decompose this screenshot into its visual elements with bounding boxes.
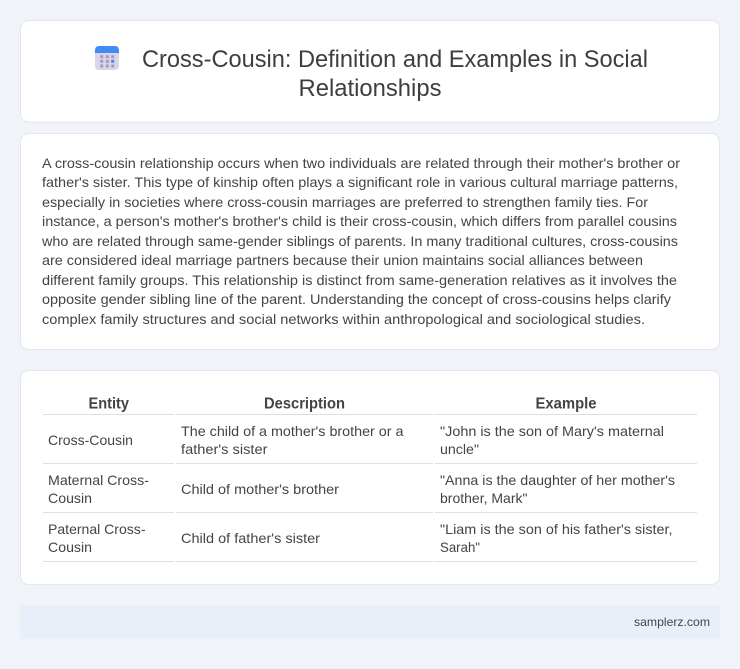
row: Cross-Cousin: The child of a mother's brother or a [181, 423, 404, 439]
text block: definition paragraph: who are related through same-gender siblings of parents. In many traditional cultures, cross-cousins [41, 233, 678, 249]
row: Cross-Cousin: "John is the son of Mary's maternal [440, 423, 664, 439]
row: Maternal Cross-Cousin: "Anna is the daughter of her mother's [440, 472, 675, 488]
table header row [88, 396, 597, 412]
text block: definition paragraph: complex family structures and social networks within anthropological and sociological studies. [42, 311, 645, 327]
row: Paternal Cross-Cousin: Cousin [48, 539, 92, 555]
text block: definition paragraph: opposite gender sibling line of the parent. Understanding the concept of cross-cousins helps clarify [42, 291, 671, 307]
row: Paternal Cross-Cousin: Paternal Cross- [48, 521, 146, 537]
row: Maternal Cross-Cousin: Child of mother's brother [181, 481, 339, 497]
row: Maternal Cross-Cousin: Maternal Cross- [48, 472, 149, 488]
table: entities [43, 396, 697, 562]
row: Cross-Cousin [48, 423, 664, 457]
table header row: Example [536, 396, 597, 412]
table header row: Description [264, 396, 345, 412]
row: Maternal Cross-Cousin [48, 472, 675, 506]
title: Relationships [298, 75, 442, 102]
text block: definition paragraph: instance, a person's mother's brother's child is their cross-cousin, which differs from parallel cousins [42, 213, 677, 229]
row: Paternal Cross-Cousin: Child of father's sister [181, 530, 320, 546]
footer text: samplerz.com [634, 615, 710, 629]
text block: definition paragraph: especially in societies where cross-cousin marriages are preferred to strengthen family ties. For [42, 194, 648, 210]
text block: definition paragraph: A cross-cousin relationship occurs when two individuals are related through their mother's brother or [42, 155, 680, 171]
icon: calendar [95, 46, 119, 70]
row: Maternal Cross-Cousin: brother, Mark" [440, 490, 528, 506]
text block: definition paragraph: different family groups. This relationship is distinct from same-generation relatives as it involves the [42, 272, 677, 288]
row: Cross-Cousin: uncle" [440, 441, 479, 457]
row: Cross-Cousin: father's sister [181, 441, 268, 457]
row: Maternal Cross-Cousin: Cousin [48, 490, 92, 506]
panel: definition text card [20, 134, 720, 350]
row: Paternal Cross-Cousin: Sarah" [440, 539, 480, 555]
text block: definition paragraph: father's sister. This type of kinship often plays a significant role in various cultural marriage patterns, [42, 174, 678, 190]
title: Cross-Cousin: Definition and Examples in Social [142, 46, 648, 73]
row: Paternal Cross-Cousin: "Liam is the son of his father's sister, [440, 521, 672, 537]
text block: definition paragraph: are considered ideal marriage partners because their union maintains social alliances between [42, 252, 643, 268]
row: Cross-Cousin: Cross-Cousin [48, 432, 133, 448]
panel: title card [20, 20, 720, 122]
text block: definition paragraph [41, 155, 680, 327]
footer bar [20, 605, 720, 639]
row: Paternal Cross-Cousin [48, 521, 672, 555]
panel: table card [20, 370, 720, 584]
table header row: Entity [88, 396, 129, 412]
title [142, 46, 648, 102]
